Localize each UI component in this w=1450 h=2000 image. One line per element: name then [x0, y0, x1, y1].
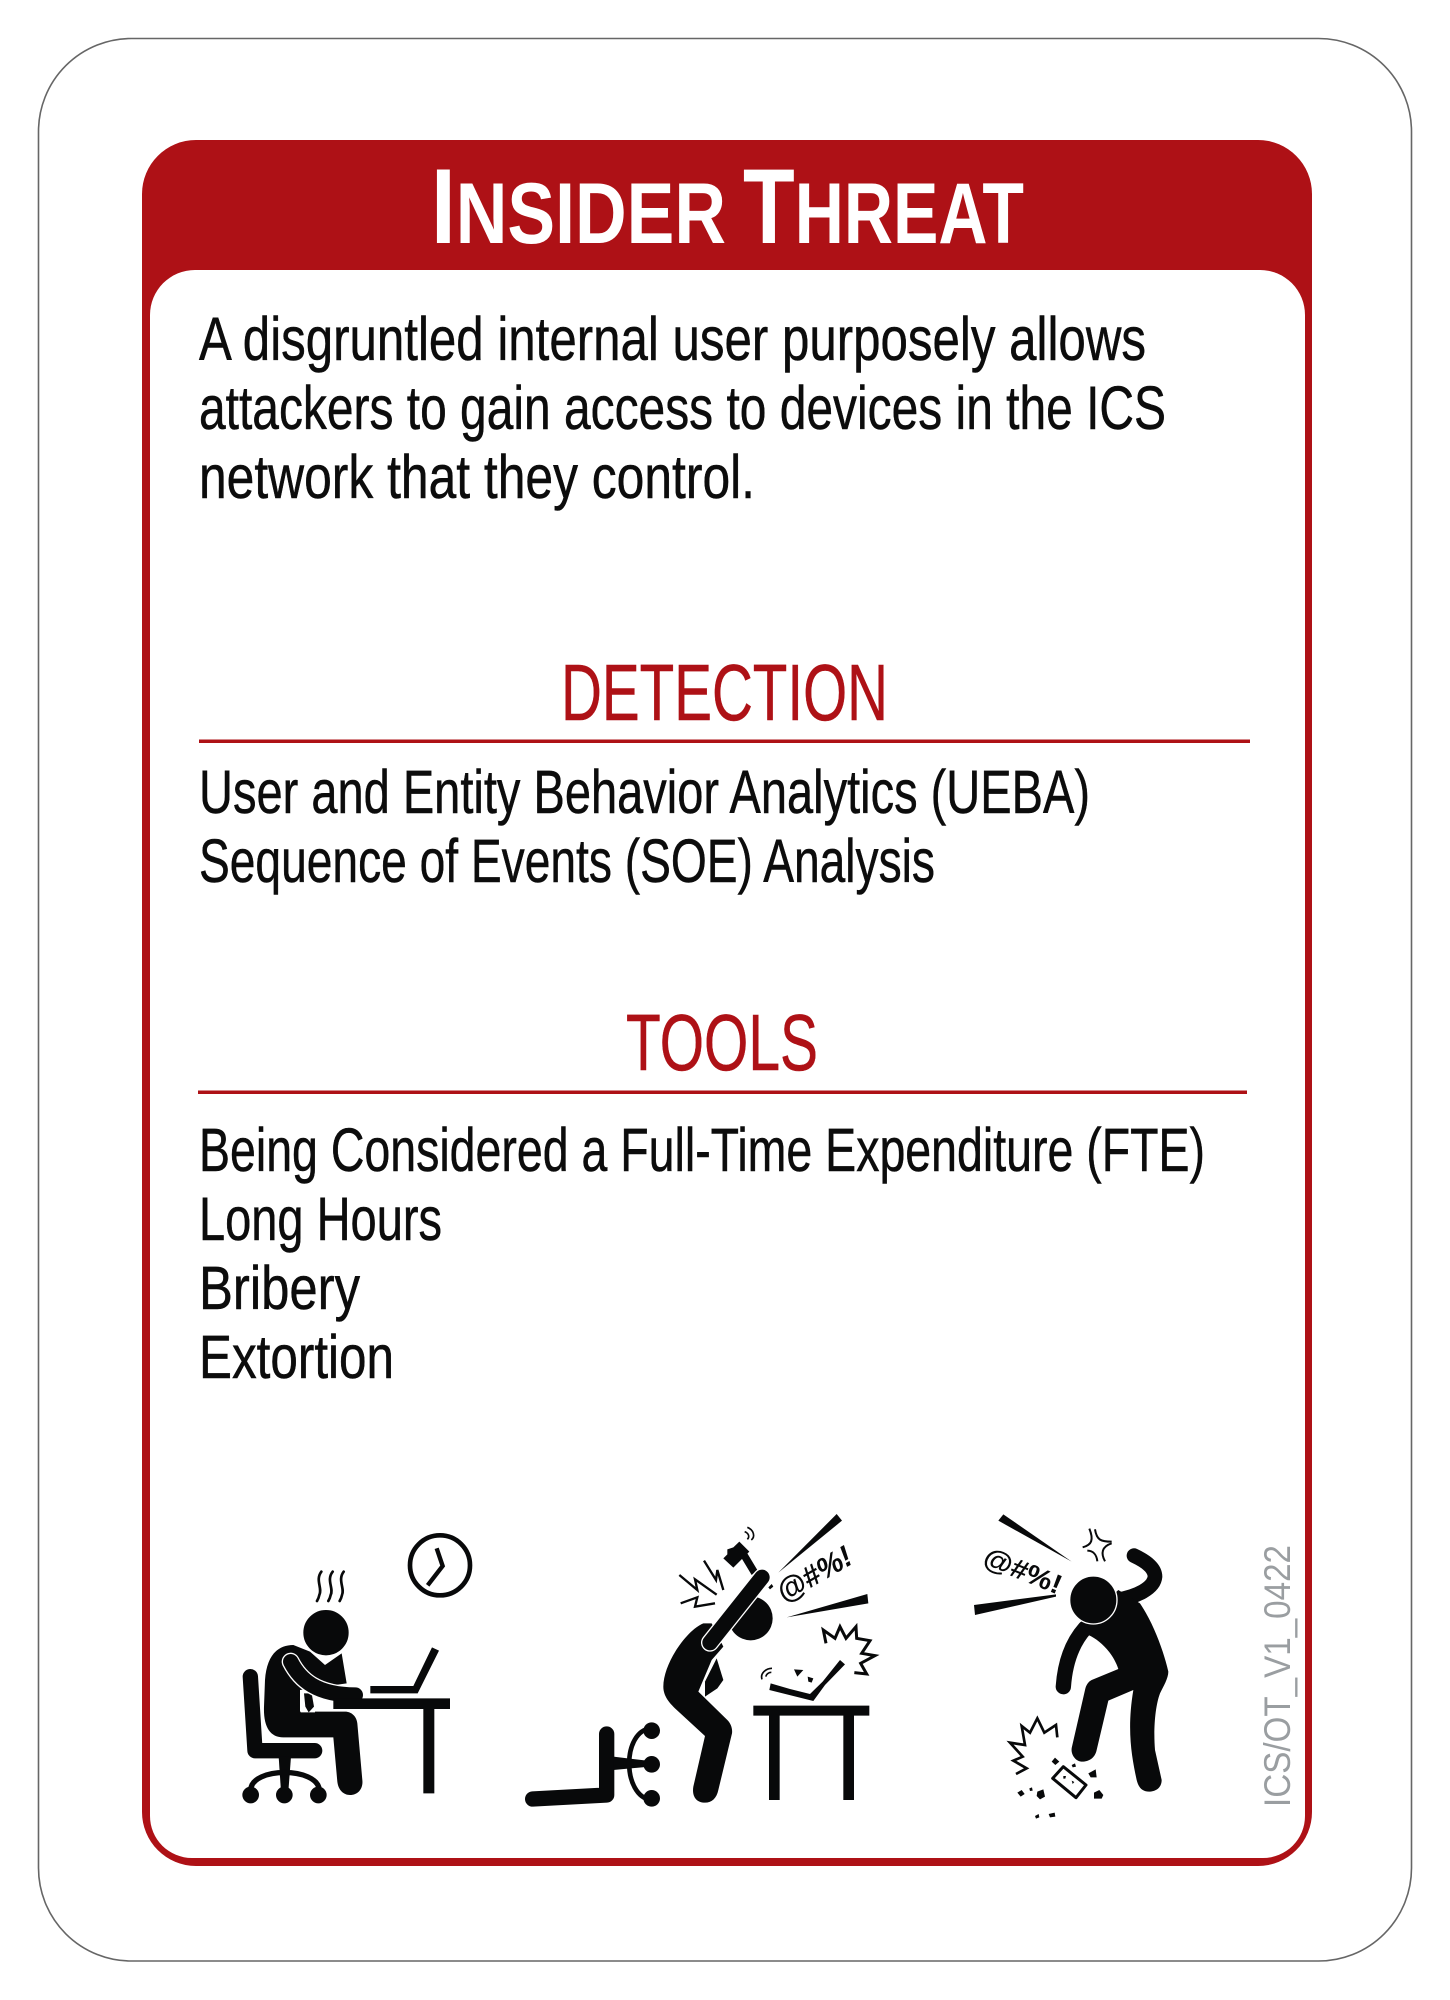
table — [753, 1706, 869, 1800]
laptop — [370, 1647, 439, 1693]
broken laptop — [769, 1660, 845, 1701]
version code: ICS/OT_V1_0422 — [1257, 1545, 1298, 1807]
description text: network that they control. — [199, 443, 755, 511]
description text: A disgruntled internal user purposely allows — [199, 305, 1146, 373]
title: INSIDER — [431, 146, 726, 266]
hammer — [723, 1542, 757, 1575]
impact burst — [823, 1627, 875, 1674]
lowered arm — [1063, 1628, 1085, 1687]
icon: fallen chair — [533, 1722, 660, 1807]
title: THREAT — [743, 146, 1024, 266]
tie — [705, 1658, 723, 1697]
desk — [333, 1698, 450, 1793]
panel: red card frame — [142, 140, 1312, 1866]
icon: angry person smashing laptop — [663, 1514, 875, 1803]
motion arcs — [745, 1527, 772, 1679]
icon: steam — [317, 1572, 344, 1601]
title — [431, 146, 1024, 266]
shout rays — [778, 1514, 842, 1573]
swear symbols: @#%! — [771, 1540, 858, 1609]
tools list: Extortion — [199, 1323, 394, 1391]
swear symbols: @#%! — [979, 1541, 1067, 1600]
body and legs — [663, 1623, 732, 1803]
head — [729, 1596, 773, 1640]
impact burst — [1010, 1718, 1057, 1774]
icon: clock — [410, 1535, 470, 1595]
arm — [291, 1662, 355, 1695]
panel: white content area — [150, 270, 1305, 1858]
raised arm — [710, 1577, 762, 1643]
tools list: Bribery — [199, 1254, 360, 1322]
broken phone — [1053, 1767, 1086, 1798]
raised arm — [1117, 1556, 1155, 1600]
body and legs — [1072, 1590, 1168, 1792]
tie — [301, 1693, 315, 1712]
lightning bolts — [679, 1561, 723, 1607]
debris — [1017, 1758, 1103, 1819]
heading: tools: TOOLS — [626, 998, 818, 1087]
detection list: User and Entity Behavior Analytics (UEBA) — [199, 758, 1090, 826]
icon: angry person stomping phone — [974, 1514, 1168, 1819]
icon: overworked person at desk — [242, 1535, 470, 1803]
anger mark — [1083, 1529, 1112, 1561]
shout rays — [998, 1514, 1072, 1562]
heading: detection: DETECTION — [561, 648, 888, 737]
detection list — [199, 758, 1090, 895]
chair — [242, 1677, 327, 1803]
description text — [199, 305, 1166, 511]
head — [303, 1609, 349, 1656]
tools list — [199, 1116, 1205, 1391]
detection list: Sequence of Events (SOE) Analysis — [199, 827, 935, 895]
person body — [264, 1645, 362, 1795]
description text: attackers to gain access to devices in the ICS — [199, 374, 1166, 442]
tools list: Long Hours — [199, 1185, 442, 1253]
head — [1070, 1576, 1117, 1624]
